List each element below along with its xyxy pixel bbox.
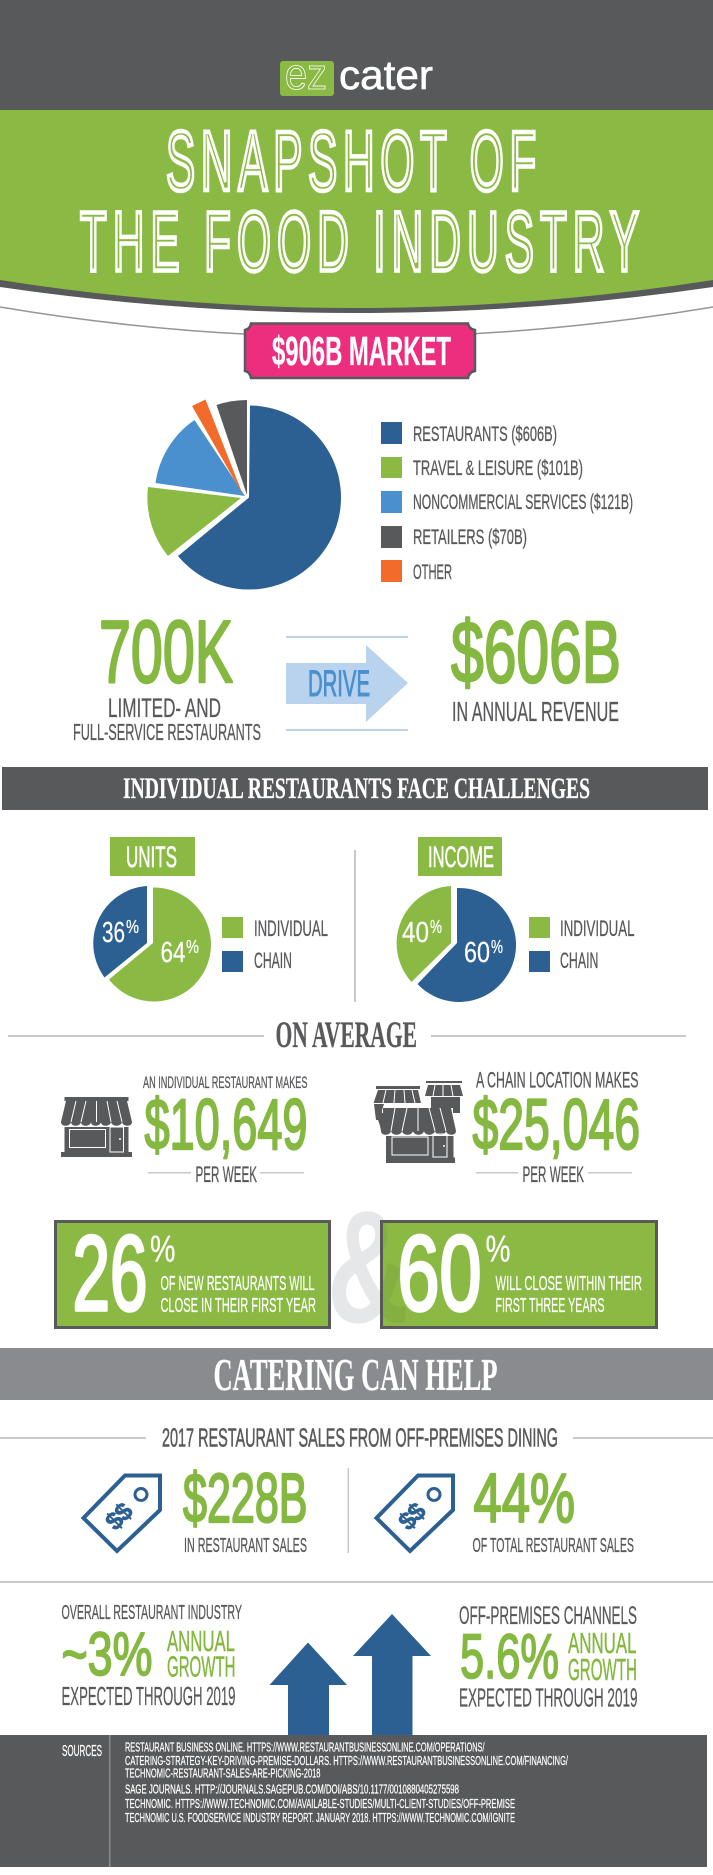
income heading: INCOME [428,841,494,874]
units legend: INDIVIDUAL [254,916,328,941]
units pie chart [93,886,211,1001]
heading: on average: ON AVERAGE [276,1015,417,1056]
slice: travel and leisure [147,487,241,556]
stat: 606B revenue [451,604,621,727]
units pie chart: 64 [160,937,186,969]
chain per week: PER WEEK [522,1162,584,1187]
market pie legend: RETAILERS ($70B) [413,526,527,549]
sources list [125,1740,568,1825]
title line 2: THE FOOD INDUSTRY [80,195,639,289]
income pie chart [397,886,516,1002]
stat: 44 percent sales [376,1459,634,1557]
callout: 26 percent: % [150,1228,176,1270]
market pie chart [147,400,341,589]
title line 1: SNAPSHOT OF [166,115,536,209]
stat: 700K restaurants [73,602,261,745]
arrow: drive: DRIVE [308,663,370,704]
panel: off-premises growth: 5.6% [460,1622,559,1692]
slice: restaurants [178,406,341,589]
panel: overall growth: ANNUAL [167,1626,235,1658]
panel: off-premises growth: ANNUAL [568,1628,636,1660]
arrow: drive [286,636,408,731]
stat: 700K restaurants: 700K [99,602,233,701]
stat: 606B revenue: $606B [451,604,621,701]
units pie chart: % [126,917,139,937]
icon: price tag [84,1476,160,1551]
slice: other [192,400,243,495]
market pie legend: TRAVEL & LEISURE ($101B) [413,457,583,480]
individual per week: PER WEEK [196,1162,257,1187]
callout: 60 percent: FIRST THREE YEARS [496,1295,604,1317]
title banner [0,110,713,313]
stat: 228B sales [84,1459,308,1557]
income pie chart: % [491,937,503,957]
individual amount: $10,649 [144,1086,308,1165]
panel: overall growth [62,1602,242,1711]
callout: 60 percent: 60 [398,1213,482,1333]
income heading [418,837,502,876]
market badge: $906B MARKET [272,328,451,374]
slice: noncommercial services [156,420,245,496]
panel: overall growth: EXPECTED THROUGH 2019 [62,1681,236,1711]
units pie chart: 36 [102,917,125,949]
text: GROWTH [568,1652,637,1687]
income pie chart: 60 [464,937,490,969]
arrow: overall growth [270,1642,347,1736]
ampersand: & [327,1177,409,1356]
section banner: catering can help [0,1348,713,1400]
ezCater logo: ez [285,50,327,99]
units legend: CHAIN [254,948,292,973]
arrow: off-premises growth [353,1614,431,1736]
stat: 700K restaurants: LIMITED- AND [108,693,221,723]
panel: sources [0,1735,707,1867]
units heading [110,837,195,876]
panel: overall growth: ~3% [62,1620,152,1688]
icon: price tag: $$ [393,1497,432,1536]
market pie legend: RESTAURANTS ($606B) [413,423,557,446]
sources list: TECHNOMIC-RESTAURANT-SALES-ARE-PICKING-2018 [125,1766,320,1780]
icon: price tag: $$ [100,1497,139,1536]
slice: retailers [216,400,247,495]
callout: 60 percent [380,1220,658,1329]
icon: chain stores [374,1081,463,1163]
income legend: INDIVIDUAL [560,916,634,941]
stat: 700K restaurants: FULL-SERVICE RESTAURANTS [73,719,261,745]
icon: store [61,1097,132,1157]
units heading: UNITS [126,841,177,874]
panel: individual restaurant earnings [61,1074,308,1187]
panel: chain location earnings [374,1068,640,1187]
sources list: SAGE JOURNALS. HTTP://JOURNALS.SAGEPUB.COM/DOI/ABS/10.1177/0010880405275598 [125,1782,459,1796]
income pie chart: 40 [402,917,429,949]
icon: price tag [376,1476,453,1551]
units pie chart: % [186,937,199,957]
market pie legend: OTHER [413,561,452,584]
panel: units pie [93,837,328,1001]
callout: 26 percent: 26 [72,1213,148,1333]
panel: income pie [397,837,634,1002]
callout: 26 percent: CLOSE IN THEIR FIRST YEAR [160,1295,316,1317]
units legend [222,916,328,973]
income legend [529,916,634,973]
section banner: catering can help: CATERING CAN HELP [214,1350,498,1400]
stat: 44 percent sales: 44% [474,1459,575,1537]
panel: off-premises growth [459,1602,638,1712]
stat: 228B sales: IN RESTAURANT SALES [184,1534,307,1557]
sources heading: SOURCES [62,1743,102,1760]
callout: 60 percent: & [327,1177,409,1356]
income legend: CHAIN [560,948,598,973]
market badge [245,324,475,378]
header band with logo [0,0,713,110]
callout: 60 percent: % [486,1228,510,1270]
market pie legend [381,422,633,584]
income pie chart: % [430,917,442,937]
individual caption: AN INDIVIDUAL RESTAURANT MAKES [143,1074,308,1092]
ezCater logo [280,50,433,99]
callout: 26 percent [56,1213,330,1333]
panel: overall growth: OVERALL RESTAURANT INDUSTRY [62,1602,242,1624]
ezCater logo: cater [339,52,433,98]
section banner: challenges [2,767,708,810]
callout: 26 percent: OF NEW RESTAURANTS WILL [160,1273,314,1295]
stat: 228B sales: $228B [183,1459,308,1537]
panel: overall growth: GROWTH [167,1652,236,1684]
